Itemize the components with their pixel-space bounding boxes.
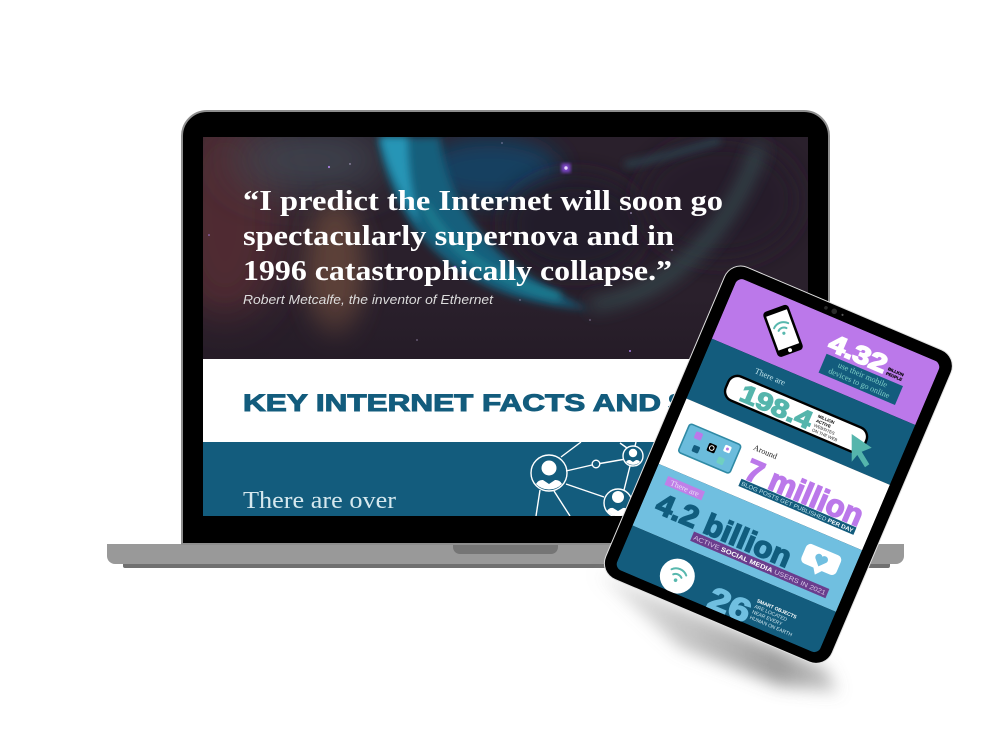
quote: 1996 catastrophically collapse.” [243,255,672,287]
icon: tablet of apps [678,423,742,474]
There are badge: There are [669,478,701,499]
There are text: There are [753,366,787,387]
Around text: Around [752,443,779,461]
dark blue band [615,526,836,654]
4.2 billion figure: 4.2 billion [651,488,796,574]
icon: phone with wifi [762,304,804,358]
teal section band [203,442,654,516]
icon: heart speech bubble [801,544,842,575]
mobile devices caption: devices to go online [827,366,891,400]
smart objects label [750,599,797,636]
icon: people network [531,442,643,517]
198.4 figure: 198.4 [736,380,817,435]
smart objects label: NEAR EVERY [751,609,784,628]
tablet [598,260,958,669]
tablet body [598,260,958,669]
quote [243,185,723,287]
smart objects label: HUMAN ON EARTH [749,615,793,638]
purple star [562,164,570,172]
There are over text: There are over [243,488,396,514]
heading: KEY INTERNET FACTS AND [243,390,661,417]
social media users label: ACTIVE SOCIAL MEDIA USERS IN 2021 [692,535,827,597]
white pill [722,373,870,455]
smart objects label: SMART OBJECTS [756,598,798,621]
mobile devices caption: use their mobile [837,361,889,390]
active websites label: ON THE WEB [811,427,838,443]
teal band [686,339,915,485]
nebula photo background [203,137,808,359]
light blue band [633,464,862,612]
billion people label: PEOPLE [885,371,903,382]
quote: spectacularly supernova and in [243,220,674,252]
active websites label [812,414,838,442]
laptop base [107,544,904,568]
stars [208,142,673,352]
active websites label: WEBSITES [813,423,836,436]
billion people label [886,367,904,382]
icon: wifi circle [660,558,695,594]
mobile devices caption [819,354,903,405]
smart objects label: ARE LOCATED [753,604,788,623]
white band [659,399,890,550]
quote: “I predict the Internet will soon go [243,185,723,217]
heading [244,394,674,412]
26 figure: 26 [703,580,757,630]
active websites label: ACTIVE [815,418,832,429]
laptop lid [182,111,829,544]
There are badge [664,476,705,500]
blog posts label: BLOG POSTS GET PUBLISHED PER DAY [740,481,854,534]
laptop screen [203,137,808,516]
billion people label: BILLION [887,366,905,377]
4.32 figure: 4.32 [824,329,891,379]
laptop [107,105,904,568]
quote attribution: Robert Metcalfe, the inventor of Ethernet [243,293,494,307]
heading: S [668,390,684,417]
icon: cursor arrow [852,434,872,467]
white heading band [203,359,689,442]
active websites label: MILLION [817,414,835,425]
purple band [712,277,941,425]
7 million figure: 7 million [740,452,869,533]
tablet screen [612,277,941,661]
tablet shadow [596,572,838,692]
